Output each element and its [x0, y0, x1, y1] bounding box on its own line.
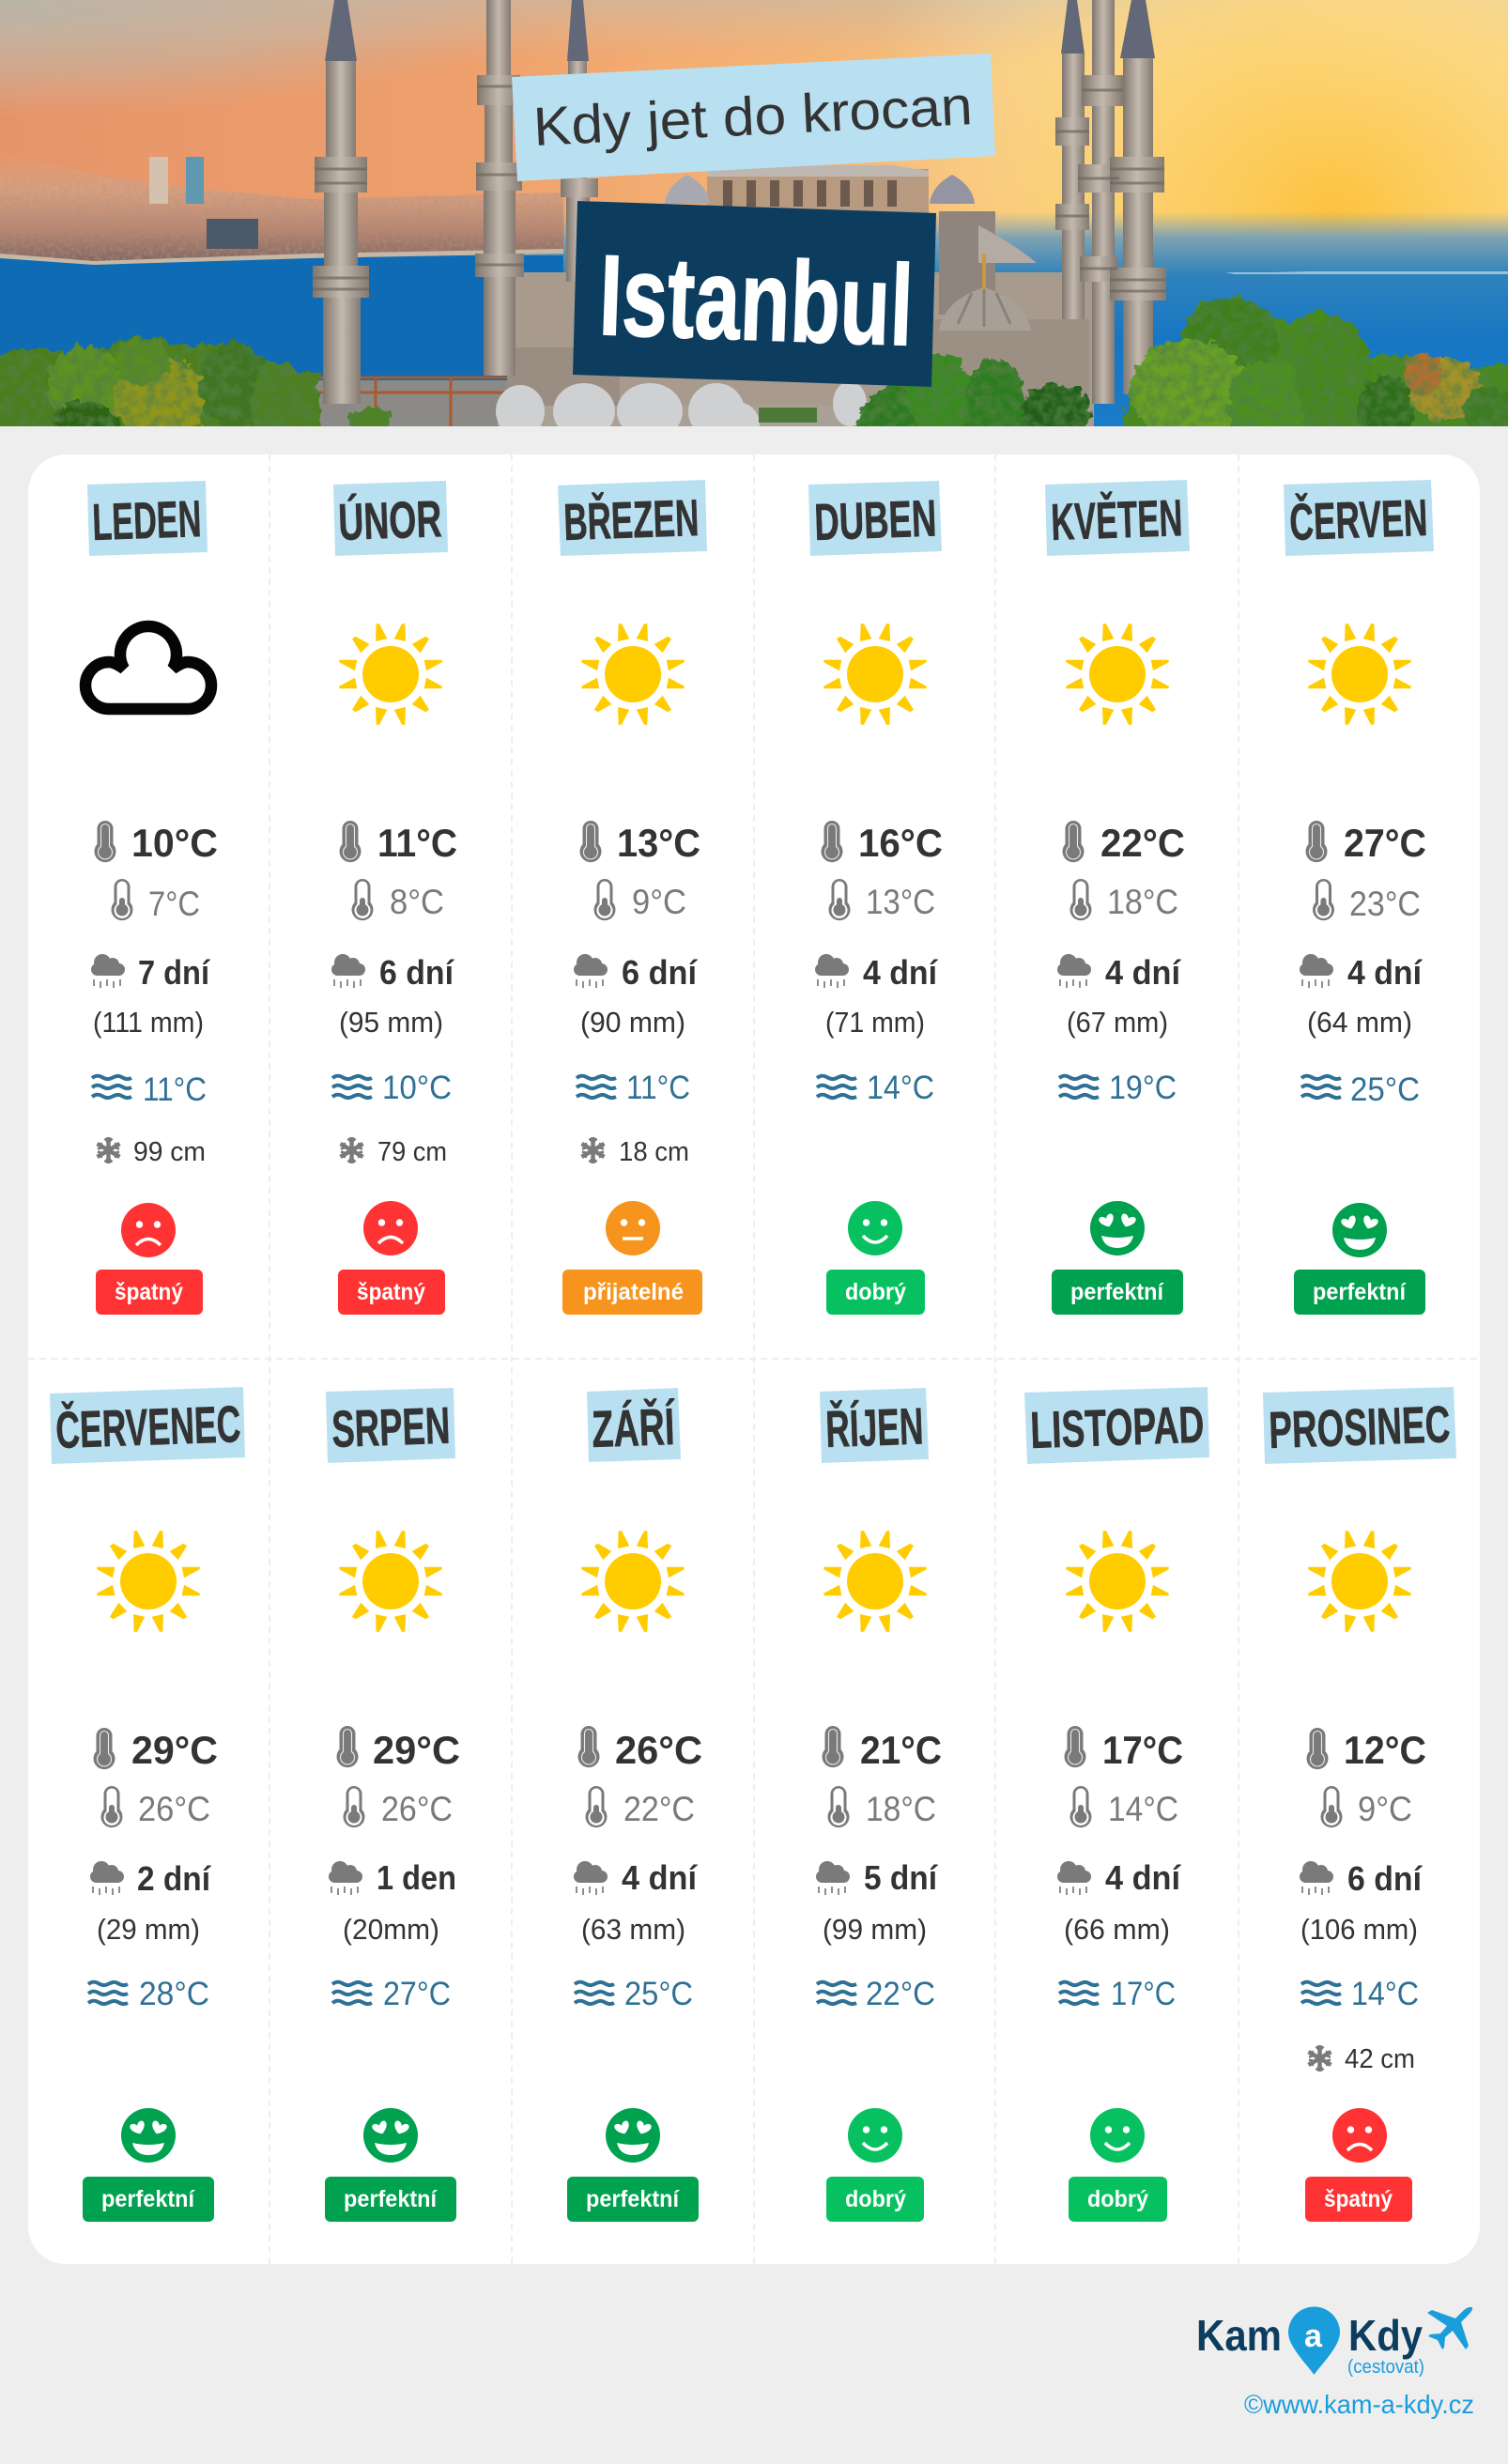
- max temperature: [1065, 1726, 1183, 1772]
- max temperature: 29°C: [373, 1728, 460, 1772]
- footer url: ©www.kam-a-kdy.cz: [1244, 2390, 1474, 2419]
- min temperature: 18°C: [1107, 883, 1178, 921]
- min temperature: [828, 879, 935, 921]
- snow: [340, 1137, 447, 1167]
- max temperature: 21°C: [860, 1728, 942, 1772]
- rating face: [848, 2108, 902, 2163]
- left stone platform: [315, 380, 507, 426]
- max temperature: [94, 1728, 218, 1772]
- rating face: [1090, 1201, 1145, 1255]
- month label: říjen: ŘÍJEN: [824, 1396, 924, 1458]
- icon: sun: [1066, 1531, 1169, 1632]
- sea temperature: [1059, 1976, 1176, 2012]
- max temperature: 29°C: [131, 1728, 218, 1772]
- rating badge: [826, 1270, 925, 1315]
- sea temperature: 25°C: [1350, 1071, 1420, 1108]
- sea temperature: 11°C: [143, 1071, 207, 1108]
- rainy days: 6 dní: [379, 953, 454, 992]
- max temperature: [336, 1726, 460, 1772]
- rating badge: dobrý: [845, 2186, 906, 2212]
- max temperature: [823, 1726, 942, 1772]
- sea temperature: 10°C: [382, 1070, 452, 1106]
- footer logo: a: [1304, 2318, 1323, 2354]
- panel: únor: [331, 481, 457, 1315]
- icon: sun: [823, 624, 927, 725]
- rainy days: 4 dní: [1105, 953, 1181, 992]
- panel: listopad: [1024, 1387, 1209, 2222]
- footer logo: [1196, 2306, 1472, 2378]
- panel: květen: [1045, 480, 1190, 1315]
- rating face: [1090, 2108, 1145, 2163]
- precipitation: (64 mm): [1307, 1006, 1412, 1039]
- min temperature: 26°C: [381, 1790, 453, 1828]
- max temperature: 22°C: [1100, 821, 1185, 865]
- rainy days: [574, 1858, 698, 1897]
- sea temperature: 14°C: [867, 1070, 934, 1106]
- month label: duben: DUBEN: [813, 488, 937, 551]
- snow: 79 cm: [377, 1137, 447, 1167]
- month label: srpen: SRPEN: [331, 1396, 451, 1458]
- trees left: [0, 334, 392, 426]
- rating badge: [1294, 1270, 1425, 1315]
- month label: březen: BŘEZEN: [562, 488, 700, 551]
- sea temperature: 27°C: [383, 1976, 451, 2012]
- panel: březen: [558, 480, 707, 1315]
- rainy days: 6 dní: [1347, 1859, 1423, 1898]
- month label: červenec: ČERVENEC: [54, 1394, 241, 1459]
- minarets: [313, 0, 1166, 404]
- rainy days: 4 dní: [622, 1858, 698, 1897]
- max temperature: [580, 821, 700, 865]
- icon: sun: [97, 1531, 200, 1632]
- sea temperature: [817, 1070, 934, 1106]
- panel: prosinec: [1263, 1387, 1456, 2222]
- precipitation: (66 mm): [1064, 1913, 1170, 1946]
- sea temperature: [577, 1070, 690, 1106]
- footer logo: (cestovat): [1347, 2357, 1424, 2378]
- icon: sun: [339, 1531, 442, 1632]
- icon: sun: [1308, 624, 1411, 725]
- footer logo: Kam: [1196, 2311, 1282, 2360]
- sea temperature: [88, 1976, 209, 2012]
- rainy days: 5 dní: [864, 1858, 938, 1897]
- min temperature: [344, 1786, 453, 1828]
- precipitation: (99 mm): [823, 1913, 927, 1946]
- rating badge: dobrý: [845, 1279, 906, 1305]
- month label: listopad: [1024, 1387, 1209, 1464]
- snow: 18 cm: [619, 1137, 689, 1167]
- subtitle banner: [512, 54, 995, 181]
- rating badge: perfektní: [1070, 1279, 1164, 1305]
- rainy days: 2 dní: [137, 1859, 211, 1898]
- month label: únor: ÚNOR: [337, 489, 442, 551]
- precipitation: (63 mm): [581, 1913, 685, 1946]
- min temperature: [101, 1786, 210, 1828]
- max temperature: [1305, 821, 1426, 865]
- rainy days: [1300, 953, 1423, 992]
- min temperature: 22°C: [623, 1790, 695, 1828]
- icon: sun: [339, 624, 442, 725]
- precipitation: (20mm): [343, 1913, 439, 1946]
- min temperature: [111, 879, 200, 923]
- rating face: [606, 1201, 660, 1255]
- sea temperature: [92, 1071, 207, 1108]
- month label: leden: [87, 481, 208, 556]
- rating badge: [338, 1270, 445, 1315]
- title banner: Istanbul: [597, 231, 916, 370]
- max temperature: 17°C: [1102, 1728, 1183, 1772]
- rating badge: [96, 1270, 203, 1315]
- precipitation: (106 mm): [1300, 1913, 1418, 1946]
- panel: červenec: [50, 1387, 245, 2222]
- max temperature: [94, 821, 218, 865]
- max temperature: [821, 821, 943, 865]
- max temperature: 27°C: [1344, 821, 1426, 865]
- max temperature: 12°C: [1344, 1728, 1426, 1772]
- min temperature: [1313, 879, 1421, 923]
- min temperature: 23°C: [1349, 885, 1421, 923]
- sea temperature: 11°C: [626, 1070, 690, 1106]
- subtitle banner: Kdy jet do krocan: [531, 75, 974, 158]
- month label: leden: LEDEN: [91, 489, 202, 551]
- rainy days: 7 dní: [138, 953, 210, 992]
- sea temperature: [1059, 1070, 1177, 1106]
- rating badge: [567, 2177, 699, 2222]
- icon: sun: [1066, 624, 1169, 725]
- snow: [1309, 2044, 1415, 2074]
- month label: únor: [333, 481, 448, 556]
- rating badge: špatný: [357, 1279, 425, 1305]
- sea temperature: 25°C: [624, 1976, 693, 2012]
- icon: sun: [581, 624, 685, 725]
- sea temperature: [332, 1976, 451, 2012]
- month label: červen: ČERVEN: [1288, 488, 1428, 551]
- rainy days: [815, 953, 938, 992]
- month label: květen: KVĚTEN: [1050, 488, 1183, 551]
- month label: září: [587, 1388, 681, 1462]
- sea temperature: 14°C: [1351, 1976, 1419, 2012]
- panel: months card: [28, 454, 1480, 2264]
- min temperature: 14°C: [1108, 1790, 1178, 1828]
- month label: březen: [558, 480, 707, 556]
- header photo: Blue Mosque and Bosphorus at sunset: [0, 0, 1508, 447]
- icon: cloud: [85, 626, 211, 709]
- precipitation: (95 mm): [339, 1006, 443, 1039]
- small domes row: [496, 383, 867, 426]
- rating face: [363, 1201, 418, 1255]
- rating badge: perfektní: [101, 2186, 195, 2212]
- rating badge: špatný: [1324, 2186, 1393, 2212]
- trees center and right: [855, 294, 1508, 426]
- month label: červen: [1284, 480, 1434, 556]
- rainy days: [90, 1859, 211, 1898]
- sea temperature: 19°C: [1109, 1070, 1177, 1106]
- rating face: [363, 2108, 418, 2163]
- max temperature: [1063, 821, 1185, 865]
- rainy days: [1300, 1859, 1423, 1898]
- panel: duben: [808, 481, 943, 1315]
- sea temperature: [817, 1976, 935, 2012]
- rating badge: perfektní: [1313, 1279, 1407, 1305]
- max temperature: 26°C: [615, 1728, 702, 1772]
- rating face: [848, 1201, 902, 1255]
- rainy days: [1057, 1858, 1181, 1897]
- rating badge: [826, 2177, 924, 2222]
- min temperature: [351, 879, 444, 921]
- panel: srpen: [325, 1388, 460, 2222]
- sea temperature: [1301, 1976, 1419, 2012]
- min temperature: 13°C: [866, 883, 935, 921]
- rainy days: [1057, 953, 1181, 992]
- rainy days: [574, 953, 698, 992]
- rainy days: 6 dní: [622, 953, 698, 992]
- min temperature: [1320, 1786, 1412, 1828]
- rainy days: 4 dní: [1105, 1858, 1181, 1897]
- sea temperature: [575, 1976, 693, 2012]
- rating badge: [1052, 1270, 1183, 1315]
- snow: [582, 1137, 689, 1167]
- rating badge: perfektní: [344, 2186, 438, 2212]
- month label: září: ZÁŘÍ: [591, 1397, 677, 1458]
- mosque body: [512, 272, 1094, 426]
- panel: říjen: [816, 1388, 942, 2222]
- rating face: [1332, 1203, 1387, 1257]
- sea temperature: [332, 1070, 452, 1106]
- panel: září: [567, 1388, 702, 2222]
- snow: 42 cm: [1345, 2044, 1415, 2074]
- title banner: [573, 201, 936, 387]
- rainy days: [91, 953, 210, 992]
- min temperature: 9°C: [632, 883, 686, 921]
- icon: map pin: [1288, 2306, 1340, 2375]
- panel: leden: [85, 481, 218, 1315]
- min temperature: 8°C: [390, 883, 444, 921]
- footer logo: Kdy: [1348, 2311, 1423, 2360]
- icon: sun: [1308, 1531, 1411, 1632]
- sea temperature: 28°C: [139, 1976, 209, 2012]
- min temperature: 7°C: [148, 885, 200, 923]
- max temperature: 11°C: [377, 821, 457, 865]
- rating face: [1332, 2108, 1387, 2163]
- rating face: [121, 1203, 176, 1257]
- rating badge: přijatelné: [583, 1279, 684, 1305]
- rating badge: dobrý: [1087, 2186, 1148, 2212]
- rainy days: [329, 1858, 456, 1897]
- rainy days: [816, 1858, 938, 1897]
- rainy days: 4 dní: [863, 953, 938, 992]
- icon: sun: [581, 1531, 685, 1632]
- rating badge: perfektní: [586, 2186, 680, 2212]
- icon: sun: [823, 1531, 927, 1632]
- sea temperature: [1301, 1071, 1420, 1108]
- rainy days: 1 den: [377, 1858, 456, 1897]
- max temperature: [1307, 1728, 1426, 1772]
- rating badge: [1305, 2177, 1412, 2222]
- min temperature: 26°C: [138, 1790, 210, 1828]
- rainy days: [331, 953, 454, 992]
- month label: prosinec: [1263, 1387, 1456, 1464]
- min temperature: [586, 1786, 695, 1828]
- month label: srpen: [326, 1388, 455, 1463]
- precipitation: (29 mm): [97, 1913, 200, 1946]
- min temperature: 18°C: [866, 1790, 936, 1828]
- min temperature: [1070, 1786, 1178, 1828]
- sea temperature: 22°C: [866, 1976, 935, 2012]
- rating badge: [1069, 2177, 1167, 2222]
- precipitation: (67 mm): [1067, 1006, 1168, 1039]
- precipitation: (71 mm): [825, 1006, 925, 1039]
- rating face: [121, 2108, 176, 2163]
- month label: listopad: LISTOPAD: [1029, 1395, 1205, 1459]
- min temperature: 9°C: [1358, 1790, 1412, 1828]
- rating badge: [562, 1270, 702, 1315]
- max temperature: 13°C: [617, 821, 700, 865]
- rating face: [606, 2108, 660, 2163]
- min temperature: [828, 1786, 936, 1828]
- rating badge: [325, 2177, 456, 2222]
- snow: 99 cm: [133, 1137, 206, 1167]
- rating badge: špatný: [115, 1279, 183, 1305]
- min temperature: [593, 879, 686, 921]
- precipitation: (90 mm): [580, 1006, 685, 1039]
- max temperature: [578, 1726, 702, 1772]
- max temperature: [340, 821, 457, 865]
- max temperature: 16°C: [858, 821, 943, 865]
- rating badge: [83, 2177, 214, 2222]
- month label: červenec: [50, 1387, 245, 1464]
- max temperature: 10°C: [131, 821, 218, 865]
- icon: plane: [1427, 2307, 1472, 2349]
- month label: duben: [808, 481, 942, 556]
- month label: říjen: [820, 1388, 929, 1463]
- snow: [98, 1137, 206, 1167]
- precipitation: (111 mm): [93, 1006, 204, 1039]
- panel: červen: [1284, 480, 1434, 1315]
- min temperature: [1070, 879, 1178, 921]
- rainy days: 4 dní: [1347, 953, 1423, 992]
- sea temperature: 17°C: [1111, 1976, 1176, 2012]
- month label: květen: [1045, 480, 1190, 556]
